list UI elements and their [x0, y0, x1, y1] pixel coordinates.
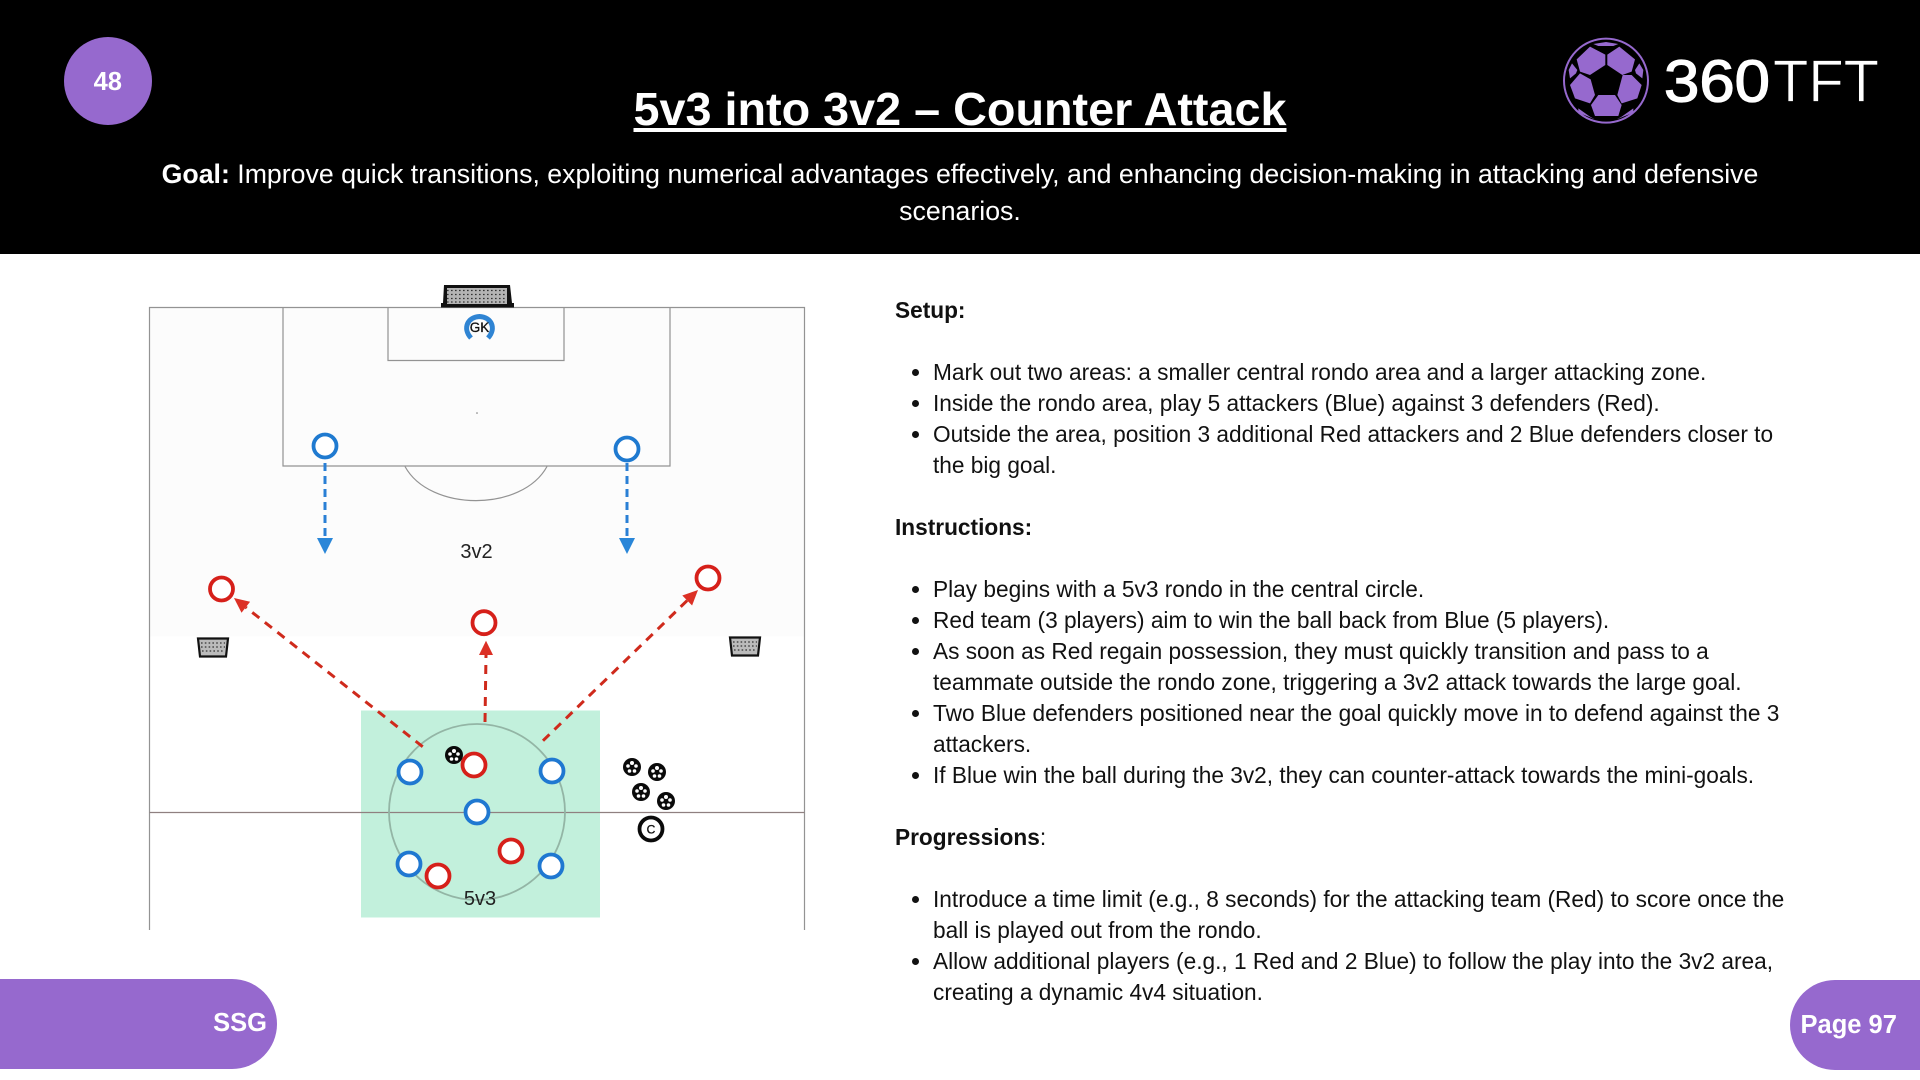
icon: mini goal right	[730, 638, 760, 656]
pitch markings	[150, 308, 804, 930]
setup list: Mark out two areas: a smaller central rondo area and a larger attacking zone.	[933, 359, 1706, 385]
progressions list	[912, 886, 1784, 1005]
instructions list: teammate outside the rondo zone, triggering a 3v2 attack towards the large goal.	[933, 669, 1742, 695]
pitch background	[150, 308, 804, 636]
setup list	[912, 359, 1773, 478]
arrow: blue defender left	[317, 463, 333, 554]
setup list: Inside the rondo area, play 5 attackers (Blue) against 3 defenders (Red).	[933, 390, 1660, 416]
tag: page number: Page 97	[1800, 1011, 1897, 1039]
setup list: Outside the area, position 3 additional Red attackers and 2 Blue defenders closer to	[933, 421, 1773, 447]
tag: SSG: SSG	[213, 1008, 267, 1036]
rondo area	[361, 710, 600, 918]
goalkeeper: GK	[470, 320, 489, 335]
progressions list: Allow additional players (e.g., 1 Red and 2 Blue) to follow the play into the 3v2 area,	[933, 948, 1773, 974]
diagram: football pitch drill	[148, 285, 806, 930]
goal statement: Goal: Improve quick transitions, exploiting numerical advantages effectively, and enhancing decision-making in attacking and defensive	[162, 159, 1758, 189]
progressions list: ball is played out from the rondo.	[933, 917, 1262, 943]
rondo red players	[426, 754, 522, 888]
title: 5v3 into 3v2 – Counter Attack	[634, 83, 1286, 135]
icon: spare balls	[623, 758, 675, 810]
label: 5v3: 5v3	[464, 888, 496, 910]
text panel: setup, instructions, progressions	[895, 297, 1784, 1005]
header band	[0, 0, 1920, 254]
goal statement: scenarios.	[899, 196, 1021, 226]
instructions list: Red team (3 players) aim to win the ball back from Blue (5 players).	[933, 607, 1609, 633]
red attackers	[210, 566, 720, 634]
icon: coach	[640, 818, 662, 840]
heading: progressions: Progressions:	[895, 824, 1046, 850]
badge: drill number 48: 48	[94, 68, 122, 96]
label: 3v2: 3v2	[460, 541, 493, 563]
arrow: pass to right attacker	[543, 590, 698, 741]
icon: mini goal left	[198, 638, 228, 656]
instructions list: Two Blue defenders positioned near the goal quickly move in to defend against the 3	[933, 700, 1779, 726]
instructions list	[912, 576, 1779, 788]
wordmark	[1664, 48, 1879, 114]
icon: ball in rondo	[445, 746, 463, 764]
tag: SSG	[0, 978, 277, 1068]
icon: coach: C	[647, 822, 656, 836]
blue defenders	[314, 434, 638, 460]
arrow: pass to centre attacker	[479, 641, 493, 722]
heading: instructions: Instructions:	[895, 514, 1032, 540]
goalkeeper	[467, 316, 492, 338]
icon: purple football	[1564, 39, 1648, 123]
rondo blue players	[398, 760, 564, 878]
tag: page number	[1790, 980, 1920, 1070]
logo: 360TFT	[1563, 38, 1879, 124]
badge: drill number 48	[64, 36, 152, 125]
instructions list: attackers.	[933, 731, 1031, 757]
instructions list: As soon as Red regain possession, they must quickly transition and pass to a	[933, 638, 1709, 664]
instructions list: Play begins with a 5v3 rondo in the central circle.	[933, 576, 1424, 602]
icon: large goal	[441, 285, 514, 308]
goal statement	[162, 159, 1758, 226]
arrow: pass to left attacker	[234, 598, 423, 747]
arrow: blue defender right	[619, 463, 635, 554]
instructions list: If Blue win the ball during the 3v2, they can counter-attack towards the mini-goals.	[933, 762, 1754, 788]
setup list: the big goal.	[933, 452, 1056, 478]
heading: setup: Setup:	[895, 297, 965, 323]
wordmark: TFT	[1773, 48, 1879, 114]
progressions list: Introduce a time limit (e.g., 8 seconds) for the attacking team (Red) to score once the	[933, 886, 1784, 912]
wordmark: 360	[1664, 48, 1770, 114]
progressions list: creating a dynamic 4v4 situation.	[933, 979, 1263, 1005]
